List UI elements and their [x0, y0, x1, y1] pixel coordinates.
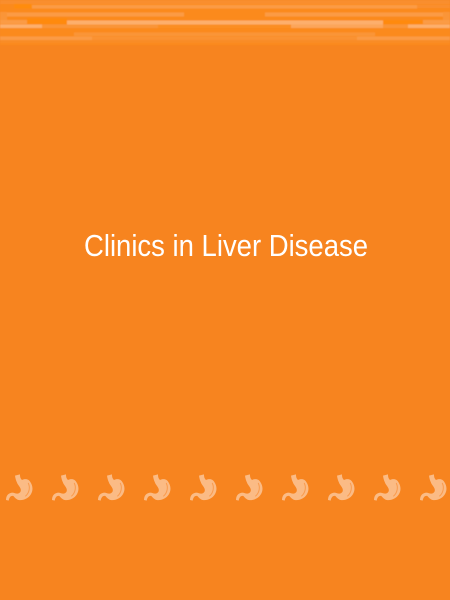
row of stomach icons — [6, 474, 447, 501]
title: Clinics in Liver Disease — [84, 229, 368, 263]
decorative header stripes — [0, 0, 450, 45]
